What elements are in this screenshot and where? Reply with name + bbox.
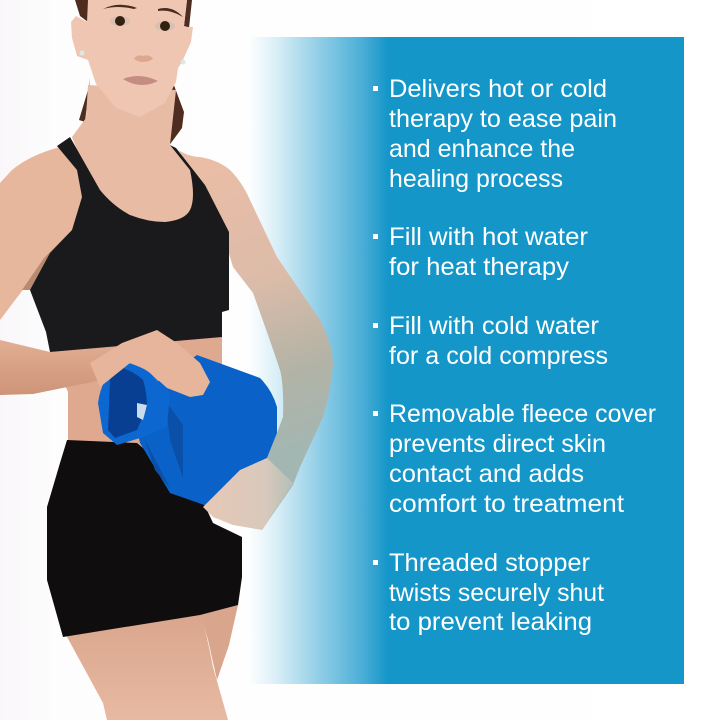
- armpit shadow: [22, 236, 66, 290]
- bullet: hot or cold therapy: [373, 75, 617, 193]
- bullet: threaded stopper: Threaded stopper: [389, 549, 590, 577]
- bullet: hot water: for heat therapy: [389, 253, 569, 281]
- mouth: [123, 76, 158, 85]
- hot water bottle cover: [130, 355, 277, 507]
- nose shadow: [134, 55, 153, 62]
- cuff: [98, 362, 170, 445]
- panel: blue gradient: [248, 37, 684, 684]
- bullet: fleece cover: contact and adds: [389, 460, 584, 488]
- back leg: [200, 605, 238, 680]
- upper hand: [90, 330, 210, 397]
- bullet: hot water: [373, 223, 588, 281]
- bottle opening: [108, 367, 147, 438]
- bullet: fleece cover: prevents direct skin: [389, 430, 606, 458]
- bullet: fleece cover: Removable fleece cover: [389, 400, 656, 428]
- bullet: hot water: Fill with hot water: [389, 223, 588, 251]
- eyebrows: [103, 5, 183, 17]
- bullet: threaded stopper: twists securely shut: [389, 579, 604, 607]
- bullet: hot or cold therapy: therapy to ease pain: [389, 105, 617, 133]
- hair: [75, 0, 192, 147]
- figure: woman holding hot water bottle: [0, 0, 333, 720]
- right arm: [178, 150, 333, 530]
- bullet: hot or cold therapy: Delivers hot or cold: [389, 75, 607, 103]
- bullet: hot or cold therapy: and enhance the: [389, 135, 575, 163]
- sports top: [30, 137, 229, 352]
- stopper: [137, 403, 147, 420]
- bullet: cold water: for a cold compress: [389, 342, 608, 370]
- bullet: threaded stopper: [373, 549, 604, 636]
- feature list: [373, 75, 656, 636]
- head: [71, 0, 193, 117]
- bullet: fleece cover: comfort to treatment: [389, 490, 624, 518]
- front leg: [66, 610, 228, 720]
- earrings: [80, 50, 186, 64]
- shorts: [47, 440, 242, 637]
- left forearm: [0, 340, 113, 395]
- left shoulder and arm: [0, 147, 90, 320]
- lower hand: [203, 458, 293, 530]
- bullet: hot or cold therapy: healing process: [389, 165, 563, 193]
- cover folds: [145, 400, 183, 488]
- neck and chest: [72, 85, 200, 240]
- waist: [50, 335, 222, 450]
- bullet: fleece cover: [373, 400, 656, 518]
- bullet: cold water: [373, 312, 608, 370]
- bullet: cold water: Fill with cold water: [389, 312, 599, 340]
- bullet: threaded stopper: to prevent leaking: [389, 608, 592, 636]
- eyes: [110, 16, 175, 31]
